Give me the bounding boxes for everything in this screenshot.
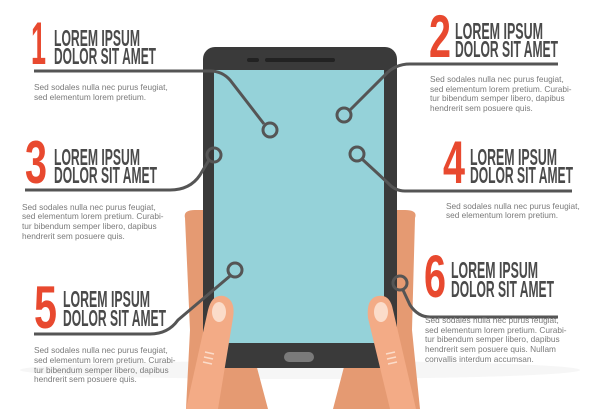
callout 2: hendrerit sem posuere quis. bbox=[430, 103, 533, 113]
callout 2 bbox=[337, 3, 572, 122]
callout 2: tur bibendum semper libero, dapibus bbox=[430, 93, 565, 103]
callout 4 bbox=[350, 129, 580, 220]
callout 3: DOLOR SIT AMET bbox=[54, 162, 157, 188]
callout 3: LOREM IPSUM bbox=[54, 144, 140, 170]
callout 5: sed elementum lorem pretium. Curabi- bbox=[34, 355, 176, 365]
shadow bbox=[20, 361, 580, 379]
callout 5: LOREM IPSUM bbox=[63, 286, 150, 312]
callout 1 bbox=[31, 10, 277, 137]
callout 6: 6 bbox=[424, 243, 446, 310]
callout 3 bbox=[22, 129, 221, 241]
callout 3: hendrerit sem posuere quis. bbox=[22, 231, 125, 241]
callout 5 bbox=[34, 263, 242, 384]
callout 5: DOLOR SIT AMET bbox=[63, 305, 166, 331]
callout 6 bbox=[393, 243, 567, 364]
callout 6: tur bibendum semper libero, dapibus bbox=[425, 334, 560, 344]
callout 2: 2 bbox=[429, 3, 451, 70]
callout 3: tur bibendum semper libero, dapibus bbox=[22, 221, 157, 231]
callout 3: 3 bbox=[25, 129, 47, 196]
callout 4: Sed sodales nulla nec purus feugiat, bbox=[446, 201, 580, 211]
callout 6: Sed sodales nulla nec purus feugiat, bbox=[425, 315, 559, 325]
right hand bbox=[333, 210, 420, 409]
callout 4: 4 bbox=[443, 129, 465, 196]
callout 3: Sed sodales nulla nec purus feugiat, bbox=[22, 202, 156, 212]
callout 6: convallis interdum accumsan. bbox=[425, 354, 534, 364]
thumbs over tablet bbox=[186, 296, 416, 409]
callout 1: DOLOR SIT AMET bbox=[54, 43, 156, 69]
callout 1: 1 bbox=[31, 10, 46, 77]
callout 1: sed elementum lorem pretium. bbox=[34, 92, 146, 102]
left hand bbox=[185, 210, 268, 409]
callout 2: sed elementum lorem pretium. Curabi- bbox=[430, 84, 572, 94]
callout 3: sed elementum lorem pretium. Curabi- bbox=[22, 211, 164, 221]
callout 5: 5 bbox=[34, 274, 57, 341]
callout 5: hendrerit sem posuere quis. bbox=[34, 374, 137, 384]
callout 1: Sed sodales nulla nec purus feugiat, bbox=[34, 82, 168, 92]
callout 5: Sed sodales nulla nec purus feugiat, bbox=[34, 345, 168, 355]
callout 2: Sed sodales nulla nec purus feugiat, bbox=[430, 74, 564, 84]
callout 1: LOREM IPSUM bbox=[54, 25, 140, 51]
callout 6: sed elementum lorem pretium. Curabi- bbox=[425, 325, 567, 335]
callout 6: hendrerit sem posuere quis. Nullam bbox=[425, 344, 556, 354]
tablet bbox=[203, 47, 397, 368]
callout 5: tur bibendum semper libero, dapibus bbox=[34, 365, 169, 375]
callout 4: sed elementum lorem pretium. bbox=[446, 210, 558, 220]
